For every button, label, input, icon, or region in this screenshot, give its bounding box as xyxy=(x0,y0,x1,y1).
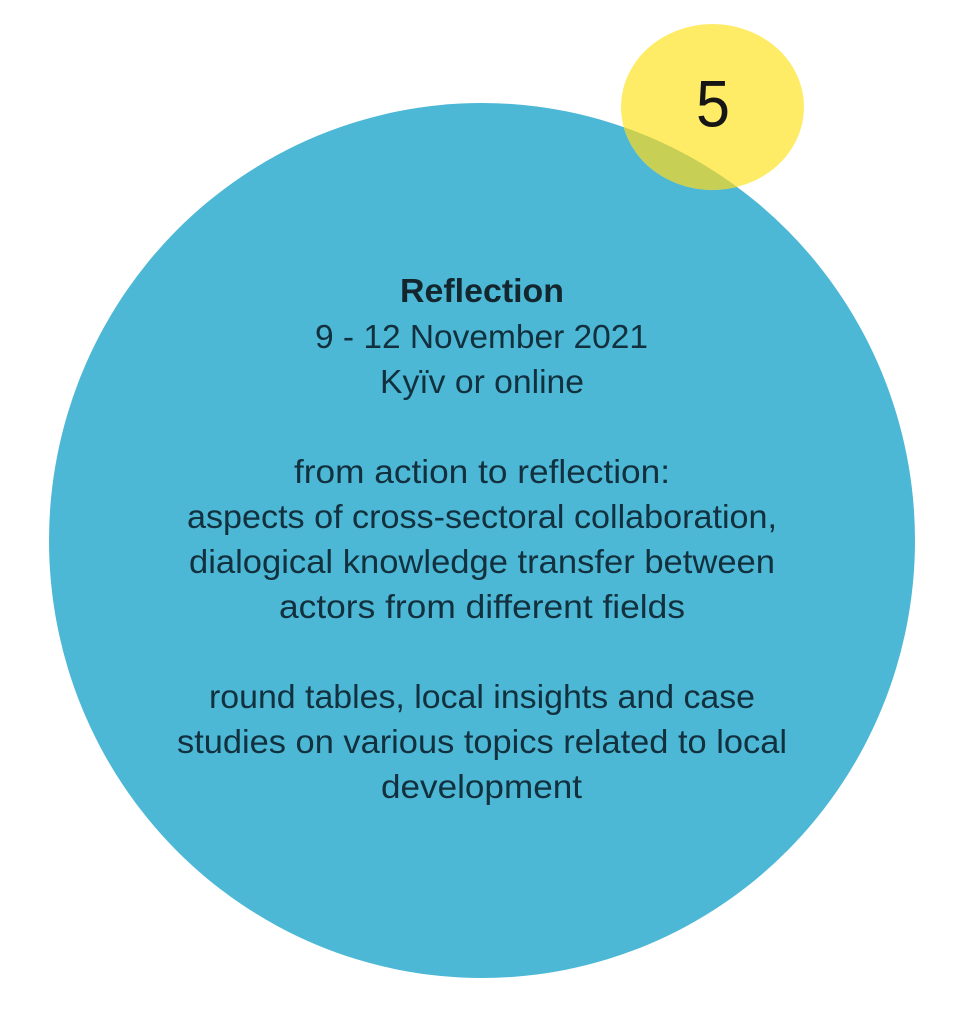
text block: from action to reflection: aspects of cross-sectoral collaboration, xyxy=(187,498,777,535)
text block: from action to reflection: dialogical knowledge transfer between xyxy=(189,543,775,580)
text block: from action to reflection xyxy=(187,453,777,625)
badge overlap with blue circle xyxy=(624,127,737,190)
text block: date and place: 9 - 12 November 2021 xyxy=(315,318,648,355)
text block: from action to reflection: from action to reflection: xyxy=(294,453,670,490)
badge: yellow number circle xyxy=(621,24,804,190)
text block: round tables: round tables, local insights and case xyxy=(209,678,755,715)
text block: from action to reflection: actors from different fields xyxy=(279,588,685,625)
panel: large blue circle xyxy=(49,103,915,978)
heading: Reflection xyxy=(400,272,564,309)
text block: round tables: studies on various topics related to local xyxy=(177,723,787,760)
text block: date and place xyxy=(315,318,648,400)
text block: round tables: development xyxy=(381,768,582,805)
text block: date and place: Kyïv or online xyxy=(380,363,584,400)
text block: round tables xyxy=(177,678,787,805)
step number: 5 xyxy=(696,66,730,140)
